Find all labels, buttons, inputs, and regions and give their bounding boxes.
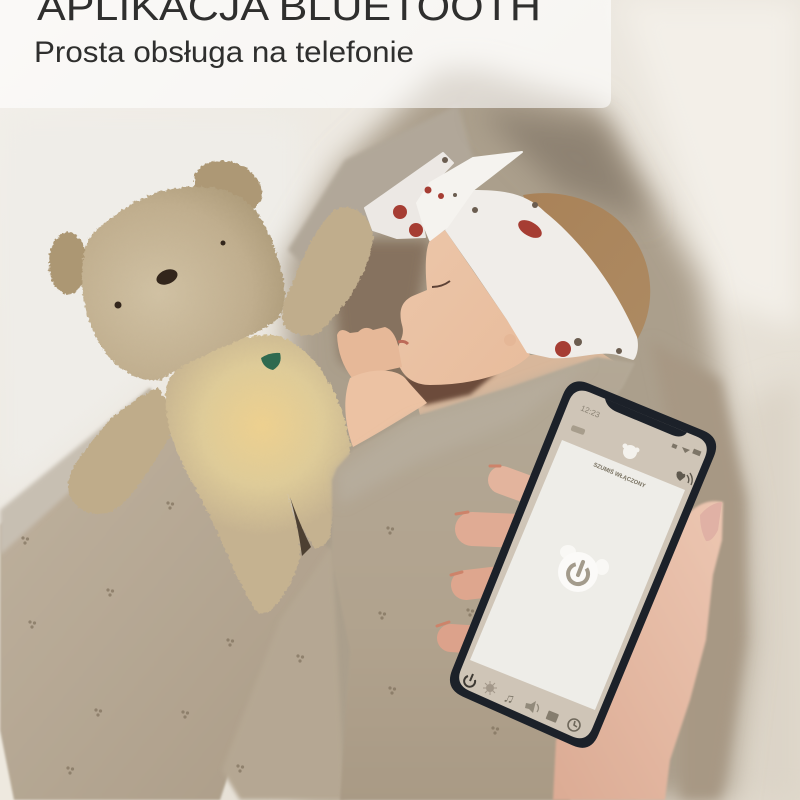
- white panel: [470, 440, 685, 710]
- headband band: [445, 190, 638, 360]
- screen label: SZUMIŚ WŁĄCZONY: [592, 461, 647, 490]
- nav: music: ♫: [501, 688, 517, 707]
- bear body and legs with glow: [166, 335, 350, 614]
- status icons: [671, 443, 701, 456]
- baby hand: [337, 327, 402, 378]
- hand fingers behind phone: [437, 466, 535, 640]
- blanket eyelet dots: [21, 501, 304, 775]
- baby arm: [345, 370, 427, 447]
- small bear logo: [622, 444, 640, 459]
- smartphone: [450, 381, 716, 748]
- hand palm and thumb: [553, 501, 723, 800]
- blanket covering the baby: [332, 357, 635, 800]
- bear head: [82, 187, 285, 380]
- heart sound icon: [676, 471, 692, 485]
- fingernails: [437, 466, 500, 626]
- nav: timer: [545, 710, 559, 723]
- battery icon: [570, 425, 586, 435]
- phone body: [450, 381, 716, 748]
- baby: [337, 152, 650, 447]
- baby neck and shoulder: [415, 352, 620, 415]
- blanket in the foreground, left: [0, 388, 345, 800]
- bottom navigation icons: [464, 674, 580, 731]
- title panel: [0, 0, 611, 108]
- subtitle: Prosta obsługa na telefonie: [34, 36, 414, 69]
- gap between bear legs: [290, 497, 311, 556]
- headband knot: [417, 152, 522, 240]
- bear heart: [261, 353, 281, 370]
- bear left arm: [68, 388, 172, 514]
- phone screen: [459, 391, 707, 738]
- baby face: [397, 230, 530, 385]
- notch: [605, 398, 687, 437]
- bear right arm: [282, 207, 373, 335]
- bear eyes and nose: [114, 240, 226, 308]
- nav: clock: [568, 719, 580, 731]
- nav: power: [464, 674, 475, 687]
- chin shadow: [400, 372, 497, 405]
- headband tail: [365, 153, 453, 238]
- cherry leaves: [442, 157, 622, 354]
- baby hat: [523, 193, 650, 340]
- nav: volume: [525, 701, 538, 713]
- bear ears: [49, 232, 87, 294]
- blanket behind the baby: [285, 70, 750, 800]
- cherries: [393, 186, 571, 357]
- blanket eyelet dots: [378, 526, 499, 735]
- nav: brightness: [483, 681, 497, 695]
- status time: 12:23: [579, 404, 602, 420]
- power button bear: [558, 545, 609, 592]
- thumbnail: [700, 502, 722, 541]
- teddy bear: [49, 152, 373, 614]
